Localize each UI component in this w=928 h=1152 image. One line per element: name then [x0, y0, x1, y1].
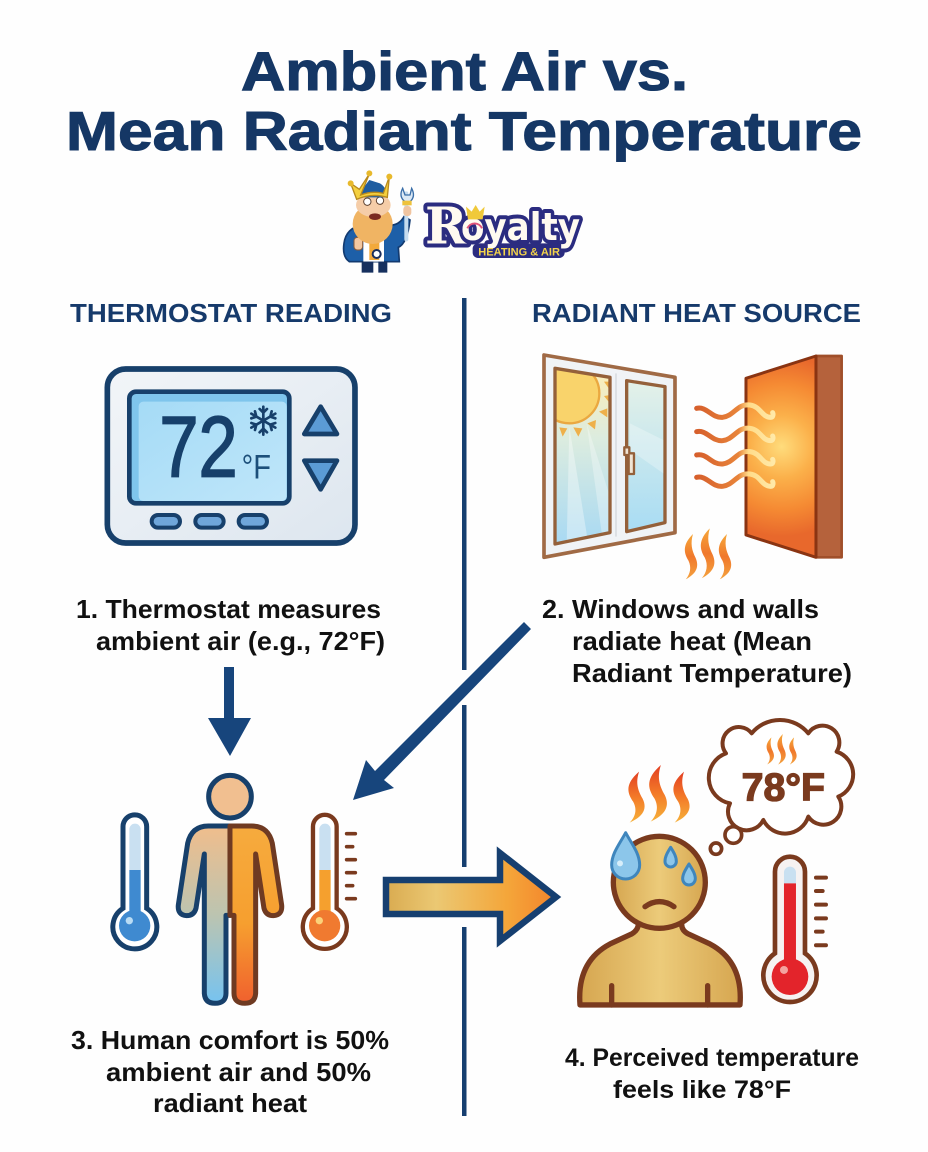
thermostat down button	[304, 461, 337, 489]
right column heading: RADIANT HEAT SOURCE	[532, 298, 861, 328]
step 1 text: ambient air (e.g., 72°F)	[96, 626, 385, 656]
warm thermometer	[303, 815, 355, 949]
hot thermometer	[763, 857, 826, 1002]
thought cloud	[709, 720, 853, 854]
wall	[746, 356, 842, 557]
step 3 text: 3. Human comfort is 50%	[71, 1025, 389, 1055]
step 2 text: Radiant Temperature)	[572, 658, 852, 688]
thermostat screen: 72	[159, 400, 238, 496]
step 2 text	[542, 594, 852, 688]
step 4 text	[565, 1044, 859, 1104]
arrow: radiant source to person	[353, 622, 531, 800]
center divider	[462, 298, 466, 1116]
thermostat pill buttons	[152, 515, 267, 528]
logo mascot	[344, 170, 413, 273]
rising heat flames	[685, 528, 731, 579]
step 2 text: 2. Windows and walls	[542, 594, 819, 624]
step 3 text	[71, 1025, 389, 1118]
sweat drops	[612, 833, 695, 885]
arrow: comfort to perceived temperature	[386, 853, 556, 941]
window	[539, 355, 675, 557]
thermostat screen: °F	[242, 449, 271, 487]
step 1 text: 1. Thermostat measures	[76, 594, 381, 624]
step 4 text: 4. Perceived temperature	[565, 1044, 859, 1072]
arrow: thermostat down to person	[208, 667, 251, 756]
icon: human body half ambient half radiant	[113, 775, 355, 1003]
person	[178, 775, 282, 1003]
step 4 text: feels like 78°F	[613, 1076, 791, 1104]
thought cloud: 78°F	[742, 766, 825, 810]
icon: sunny window and radiating wall	[539, 355, 842, 579]
logo: Royalty Heating & Air	[344, 170, 580, 273]
logo wordmark: oyalty	[461, 205, 580, 250]
logo wordmark: HEATING & AIR	[478, 246, 560, 258]
heat waves	[697, 405, 773, 486]
icon: thermostat	[107, 369, 355, 543]
icon: overheated person with thought cloud	[580, 720, 853, 1005]
person bust	[580, 836, 740, 1005]
logo wordmark	[425, 195, 580, 258]
step 3 text: ambient air and 50%	[106, 1057, 371, 1087]
cold thermometer	[113, 815, 157, 949]
left column heading: THERMOSTAT READING	[70, 298, 392, 328]
title	[66, 40, 862, 162]
step 1 text	[76, 594, 385, 656]
heat flames	[628, 765, 690, 823]
step 2 text: radiate heat (Mean	[572, 626, 812, 656]
step 3 text: radiant heat	[153, 1088, 307, 1118]
icon: snowflake	[251, 407, 275, 435]
title: Mean Radiant Temperature	[66, 100, 862, 162]
thermostat up button	[304, 407, 337, 434]
title: Ambient Air vs.	[241, 40, 688, 102]
logo wordmark: R	[425, 195, 468, 255]
thermostat screen	[129, 392, 289, 503]
